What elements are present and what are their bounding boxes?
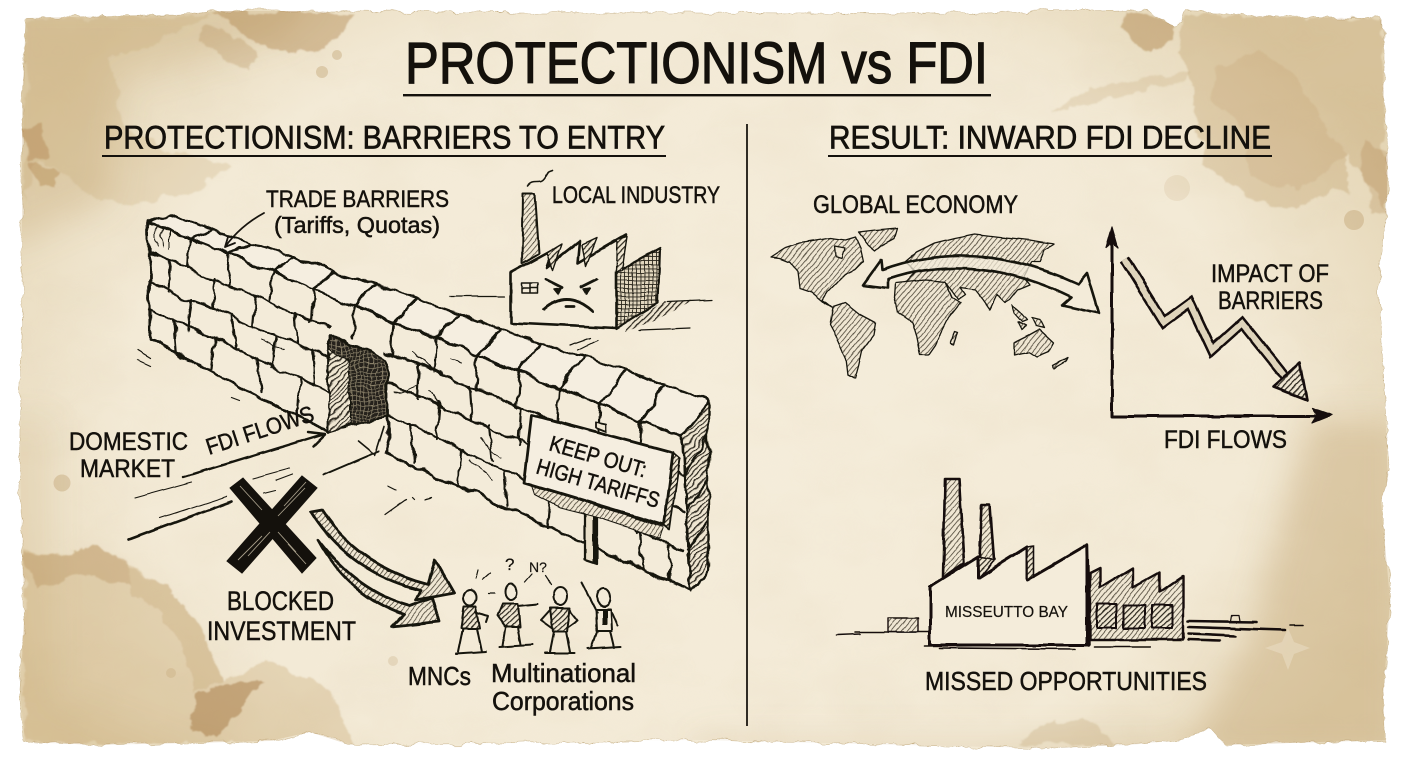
- icon: shuttered factory: [837, 479, 1303, 649]
- stone cracks: [156, 225, 595, 478]
- icon: angry local factory: [450, 170, 712, 350]
- head 1: [464, 589, 476, 605]
- stain: bottom left wash: [22, 545, 355, 745]
- droplet lower: [388, 656, 398, 666]
- market text: MARKET: [80, 455, 175, 483]
- stain: top notch blot: [1124, 12, 1175, 50]
- ground lines: [837, 625, 1303, 649]
- sign post shade: [593, 504, 597, 564]
- title text: PROTECTIONISM vs FDI: [405, 31, 988, 96]
- person 1: [456, 589, 488, 654]
- small shed: [888, 618, 918, 632]
- limbs 3: [541, 610, 578, 653]
- ground right strokes: [1188, 621, 1285, 641]
- y axis arrowhead: [1106, 227, 1118, 248]
- upper deflected arrow: [311, 510, 454, 600]
- corporations text: Corporations: [492, 686, 634, 716]
- main roof hatch: [978, 546, 1034, 580]
- pointer arrow: [225, 213, 264, 247]
- stain: bottom middle: [1020, 718, 1115, 748]
- sign line 1: KEEP OUT:: [547, 431, 650, 482]
- ground thick strokes: [935, 637, 1183, 645]
- factory side: [616, 248, 660, 329]
- stain: bottom left band: [22, 545, 130, 590]
- Southeast Asia islands: [1012, 305, 1044, 330]
- N question text: N?: [529, 559, 547, 575]
- factory shadow: [625, 300, 695, 332]
- head 3: [553, 587, 567, 605]
- head 2: [505, 584, 517, 600]
- limbs 1: [456, 612, 488, 654]
- barriers text: BARRIERS: [1218, 287, 1323, 315]
- FDI flows label: FDI FLOWS: [203, 400, 317, 460]
- roof panels: [547, 237, 627, 272]
- stain: top left wash: [25, 15, 230, 205]
- droplet right: [1344, 210, 1364, 230]
- New Zealand: [1053, 358, 1068, 369]
- Greenland: [858, 228, 898, 251]
- illustration: stone wall with gate: [149, 214, 708, 590]
- title underline: [403, 94, 991, 96]
- person 2: [497, 584, 538, 647]
- Australia: [1014, 330, 1053, 357]
- X arm 1: [230, 478, 316, 573]
- body 2: [497, 604, 520, 627]
- Eurasia: [905, 234, 1055, 310]
- tall chimney: [943, 479, 964, 578]
- road line right: [323, 451, 379, 475]
- droplet pale: [1164, 175, 1190, 201]
- tie: [603, 609, 606, 624]
- MNCs text: MNCs: [408, 661, 471, 691]
- label: missed opportunities: MISSED OPPORTUNITIES: [925, 666, 1207, 696]
- limbs 2: [500, 604, 538, 647]
- confusion symbols: [505, 555, 547, 575]
- droplets: [54, 50, 1364, 678]
- sign text: [534, 431, 663, 513]
- keep out sign board: [524, 415, 680, 564]
- label: blocked investment: [207, 586, 356, 646]
- stain: long streak: [1050, 70, 1188, 112]
- declining line outline: [1125, 259, 1286, 378]
- gate mesh: [329, 335, 386, 430]
- tariffs quotas text: (Tariffs, Quotas): [274, 212, 440, 238]
- domestic text: DOMESTIC: [69, 428, 188, 456]
- stain: bottom left dark blot: [190, 680, 265, 736]
- right heading text: RESULT: INWARD FDI DECLINE: [829, 120, 1271, 156]
- stain: left blot: [30, 160, 58, 188]
- left heading underline: [102, 155, 666, 157]
- declining line head: [1273, 363, 1307, 400]
- X scratches: [238, 482, 306, 564]
- ground lines: [450, 297, 712, 350]
- label: FDI flows axis: FDI FLOWS: [1164, 426, 1287, 454]
- factory sign text: MISSEUTTO BAY: [945, 604, 1068, 621]
- frown: [544, 299, 593, 311]
- wall front face: [149, 222, 690, 590]
- body 1: [461, 606, 480, 628]
- eye dots: [554, 288, 590, 294]
- multinational text: Multinational: [491, 658, 636, 688]
- x axis arrowhead: [1312, 408, 1332, 423]
- person 4: [582, 583, 620, 649]
- investment text: INVESTMENT: [207, 616, 356, 646]
- icon: double-headed curved arrow: [863, 256, 1099, 313]
- South America: [830, 303, 875, 379]
- capstone row: [149, 214, 210, 239]
- angry eyes: [546, 279, 597, 287]
- blocked text: BLOCKED: [227, 586, 334, 616]
- gate opening: [329, 335, 386, 430]
- road thin lines: [134, 468, 293, 518]
- stone joints: [168, 239, 670, 581]
- tie and limbs 4: [582, 583, 620, 649]
- stain: bottom left diagonal: [130, 570, 225, 695]
- chart: declining FDI flows: [1106, 227, 1332, 423]
- droplet top 2: [332, 50, 342, 60]
- small right box: [1231, 615, 1240, 621]
- end face joints: [684, 437, 708, 550]
- sign board edge: [664, 453, 680, 530]
- droplet top: [316, 66, 328, 78]
- Africa: [895, 280, 960, 355]
- center divider: [746, 124, 748, 726]
- building seam: [1087, 545, 1089, 645]
- icon: blocked X: [227, 476, 317, 573]
- label: MNCs multinational corporations: [408, 658, 636, 716]
- lower deflected arrow: [318, 540, 439, 627]
- droplet left: [54, 474, 70, 492]
- icon: confused MNC executives: [456, 570, 620, 654]
- stain: top edge patch: [215, 13, 354, 52]
- sign hook: [596, 422, 606, 432]
- stain: top right inner ring: [1210, 50, 1345, 190]
- North America: [771, 237, 863, 307]
- ground ticks: [137, 350, 432, 515]
- stone courses: [149, 252, 683, 550]
- X arm 2: [227, 476, 317, 573]
- stain: left edge patch: [22, 125, 46, 160]
- head 4: [598, 588, 610, 606]
- label: domestic market: [69, 428, 188, 483]
- sign board: [524, 415, 673, 525]
- label: global economy: GLOBAL ECONOMY: [813, 191, 1018, 219]
- road chevron: [358, 426, 384, 455]
- gate side hatch: [329, 350, 350, 430]
- wall end face: [683, 400, 708, 590]
- trade barriers text: TRADE BARRIERS: [266, 186, 449, 213]
- road thick line: [129, 501, 232, 539]
- pale star mark: [1265, 628, 1310, 670]
- capstones along wall top: [149, 214, 708, 438]
- person 3: [541, 587, 578, 653]
- chart axes: [1112, 232, 1328, 416]
- right heading underline: [828, 155, 1272, 157]
- sign underside shade: [532, 486, 664, 538]
- body 3: [550, 608, 570, 632]
- curved deflection arrows: [311, 510, 454, 627]
- chimney: [522, 194, 539, 264]
- body 4: [596, 609, 612, 631]
- impact text: IMPACT OF: [1211, 260, 1329, 288]
- confusion marks: [476, 570, 551, 594]
- FDI flows arrow and road lines: [129, 350, 432, 539]
- label: trade barriers with arrow: [225, 186, 449, 247]
- stain: streak: [198, 24, 256, 72]
- secondary windows: [1097, 604, 1172, 628]
- stain: right lobes: [1360, 138, 1388, 212]
- secondary building: [1090, 568, 1183, 640]
- sign line 2: HIGH TARIFFS: [534, 454, 663, 513]
- Madagascar: [951, 332, 958, 345]
- icon: hatched world map: [771, 228, 1068, 379]
- factory window: [522, 283, 538, 293]
- question mark: ?: [505, 555, 514, 574]
- droplet stain zone: [166, 668, 176, 678]
- label: local industry: LOCAL INDUSTRY: [552, 182, 720, 209]
- sign post: [585, 500, 597, 564]
- smoke: [528, 170, 553, 186]
- declining line fill: [1125, 259, 1286, 378]
- label: impact of barriers: [1211, 260, 1329, 315]
- Hudson bay: [835, 246, 845, 258]
- main building: [930, 545, 1087, 645]
- left heading text: PROTECTIONISM: BARRIERS TO ENTRY: [104, 120, 665, 156]
- stain: top right cup: [1180, 14, 1388, 212]
- factory front: [511, 235, 626, 328]
- FDI arrow: [184, 432, 326, 477]
- short chimney: [979, 505, 994, 570]
